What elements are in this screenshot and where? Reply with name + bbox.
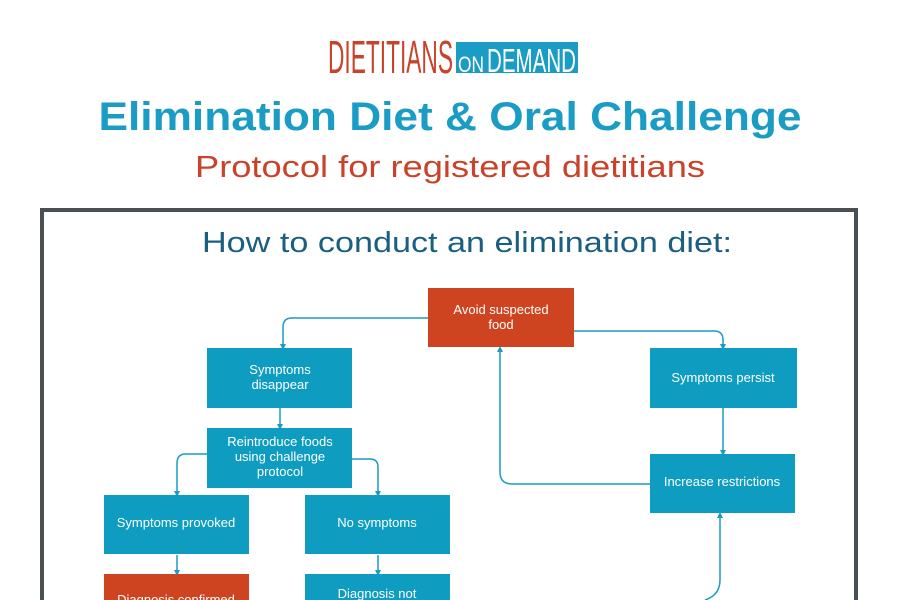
box: reintroduce foods: using challenge bbox=[235, 449, 325, 464]
box: diagnosis confirmed bbox=[104, 574, 249, 600]
box: avoid suspected food: Avoid suspected bbox=[453, 302, 549, 317]
title: Elimination Diet & Oral Challenge bbox=[98, 95, 802, 139]
box: avoid suspected food: food bbox=[488, 317, 514, 332]
box: symptoms disappear bbox=[207, 348, 352, 408]
box: increase restrictions bbox=[650, 454, 795, 513]
logo: DIETITIANS bbox=[328, 31, 453, 83]
box: no symptoms bbox=[305, 495, 450, 554]
box: symptoms provoked bbox=[104, 495, 249, 554]
logo: DEMAND bbox=[487, 42, 576, 79]
box: no symptoms: No symptoms bbox=[337, 515, 417, 530]
panel heading: How to conduct an elimination diet: bbox=[202, 227, 732, 259]
arrows bbox=[177, 318, 723, 600]
logo: ON bbox=[458, 52, 484, 77]
box: symptoms provoked: Symptoms provoked bbox=[117, 515, 235, 530]
box: avoid suspected food bbox=[428, 288, 574, 347]
box: reintroduce foods: Reintroduce foods bbox=[227, 434, 333, 449]
box: symptoms disappear: disappear bbox=[251, 377, 309, 392]
box: reintroduce foods: protocol bbox=[257, 464, 303, 479]
box: diagnosis not confirmed bbox=[305, 574, 450, 600]
box: symptoms disappear: Symptoms bbox=[249, 362, 311, 377]
box: increase restrictions: Increase restrictions bbox=[664, 474, 781, 489]
subtitle: Protocol for registered dietitians bbox=[195, 149, 705, 184]
box: reintroduce foods bbox=[207, 428, 352, 488]
box: symptoms persist bbox=[650, 348, 797, 408]
box: symptoms persist: Symptoms persist bbox=[671, 370, 775, 385]
